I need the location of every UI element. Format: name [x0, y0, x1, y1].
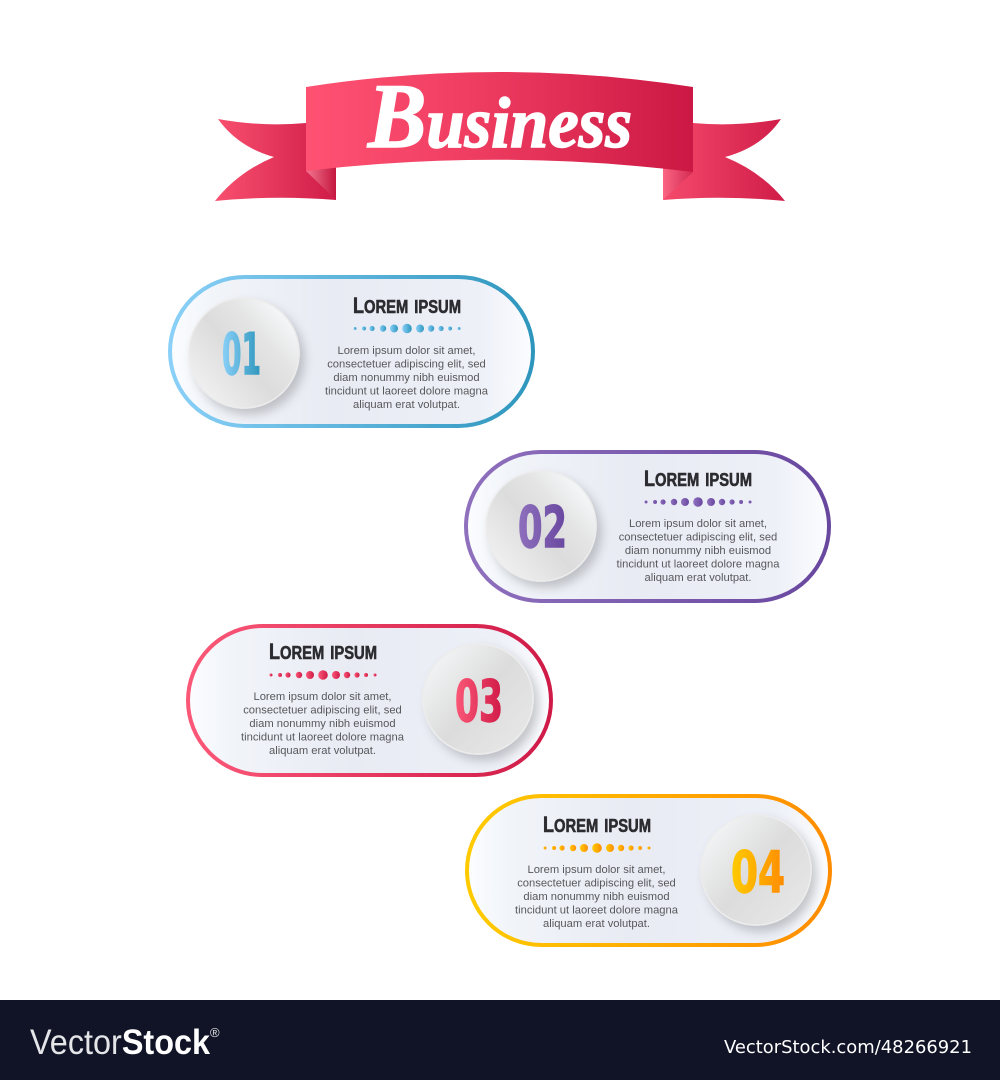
body text	[617, 518, 780, 584]
body text: tincidunt ut laoreet dolore magna	[241, 732, 405, 744]
body text: tincidunt ut laoreet dolore magna	[617, 558, 780, 570]
panel: step 03	[188, 626, 551, 775]
ribbon banner	[215, 65, 785, 201]
body text: diam nonummy nibh euismod	[249, 718, 396, 730]
footer logo: VectorStock	[30, 1023, 210, 1062]
number 02: 02	[518, 495, 567, 561]
ribbon left tail	[215, 119, 336, 201]
body text: Lorem ipsum dolor sit amet,	[629, 518, 767, 530]
panel: step 01: 01	[222, 322, 261, 388]
heading: Lorem ipsum	[644, 462, 752, 492]
panel: step 02	[466, 452, 829, 601]
body text: consectetuer adipiscing elit, sed	[619, 532, 777, 544]
body text: Lorem ipsum dolor sit amet,	[527, 864, 666, 876]
footer bar	[0, 1000, 1000, 1080]
body text: consectetuer adipiscing elit, sed	[327, 358, 486, 370]
number disc	[701, 815, 811, 925]
number 03: 03	[455, 669, 503, 735]
heading: Lorem ipsum	[269, 635, 377, 665]
number disc	[189, 298, 299, 408]
body text: diam nonummy nibh euismod	[523, 891, 670, 903]
pill outline	[188, 626, 551, 775]
footer url: VectorStock.com/48266921	[724, 1038, 972, 1058]
body text	[325, 345, 489, 411]
title: Business: Business	[367, 65, 632, 167]
dotted divider	[644, 497, 752, 507]
body text: tincidunt ut laoreet dolore magna	[325, 386, 489, 398]
pill outline	[170, 277, 533, 426]
body text: aliquam erat volutpat.	[353, 399, 460, 411]
body text: consectetuer adipiscing elit, sed	[243, 704, 402, 716]
body text: consectetuer adipiscing elit, sed	[517, 878, 676, 890]
body text: diam nonummy nibh euismod	[333, 372, 480, 384]
registered mark: ®	[210, 1025, 220, 1040]
body text: Lorem ipsum dolor sit amet,	[337, 345, 476, 357]
ribbon left fold	[306, 167, 336, 200]
body text: aliquam erat volutpat.	[645, 572, 751, 584]
ribbon right tail	[663, 119, 785, 201]
number disc	[423, 644, 533, 754]
number 04: 04	[731, 840, 785, 906]
heading: Lorem ipsum	[353, 289, 461, 319]
body text	[515, 864, 679, 930]
body text	[241, 691, 405, 757]
ribbon main band	[306, 72, 693, 172]
heading: Lorem ipsum	[543, 808, 651, 838]
dotted divider	[354, 324, 460, 333]
number disc	[486, 471, 596, 581]
pill outline	[466, 452, 829, 601]
body text: aliquam erat volutpat.	[543, 918, 650, 930]
dotted divider	[270, 670, 376, 680]
body text: aliquam erat volutpat.	[269, 745, 376, 757]
pill outline	[467, 796, 830, 945]
panel: step 01	[170, 277, 533, 426]
body text: Lorem ipsum dolor sit amet,	[253, 691, 392, 703]
body text: diam nonummy nibh euismod	[625, 545, 771, 557]
dotted divider	[544, 843, 650, 853]
ribbon right fold	[663, 167, 693, 200]
panel: step 04	[467, 796, 830, 945]
body text: tincidunt ut laoreet dolore magna	[515, 904, 679, 916]
